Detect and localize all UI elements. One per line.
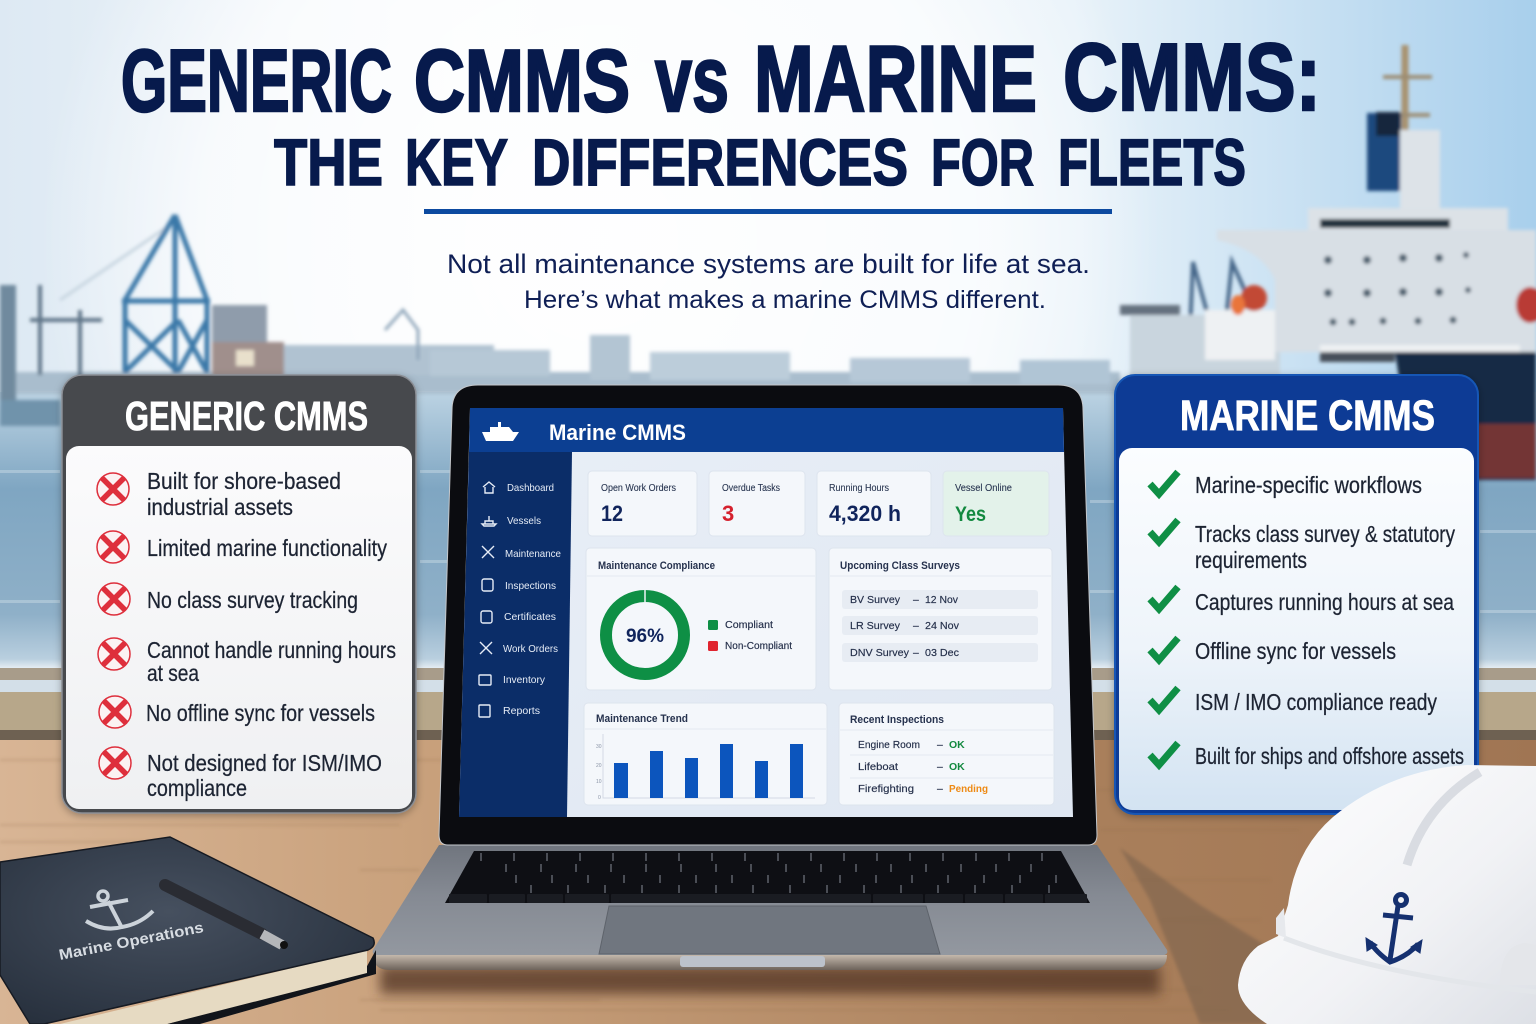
card: upcoming class surveys: – [913,594,919,606]
panel: generic CMMS [62,375,416,813]
panel: marine CMMS [1115,375,1478,814]
KPI: overdue tasks: Overdue Tasks [722,483,780,494]
chart legend: Non-Compliant [725,640,792,652]
card: upcoming class surveys: – [913,647,919,659]
card: recent inspections: Engine Room [858,739,920,751]
list: marine CMMS strengths: Built for ships and offshore assets [1195,743,1464,769]
card: recent inspections: – [937,739,943,751]
chart legend: Compliant [725,619,773,631]
card: recent inspections [839,703,1054,805]
KPI: overdue tasks: 3 [722,501,734,526]
app name: Marine CMMS [549,420,686,445]
app sidebar: Maintenance [505,548,561,560]
card: upcoming class surveys [829,548,1052,690]
subtitle: Here’s what makes a marine CMMS different. [524,286,1046,314]
list: generic CMMS limitations: industrial assets [147,494,293,520]
title line 2: THE [274,125,383,199]
card: upcoming class surveys: LR Survey [850,620,901,632]
card: recent inspections: OK [949,761,965,773]
list: marine CMMS strengths [1150,472,1464,769]
card: upcoming class surveys: BV Survey [850,594,901,606]
laptop base [373,845,1167,970]
app header bar [469,408,1064,452]
app sidebar: Inventory [503,674,546,686]
list: generic CMMS limitations: No class survey tracking [147,587,358,613]
list: marine CMMS strengths: Tracks class survey & statutory [1195,521,1455,547]
KPI: vessel online: Vessel Online [955,483,1012,494]
app sidebar: Work Orders [503,643,558,655]
card: maintenance trend: Maintenance Trend [596,713,688,725]
title line 1: MARINE [754,26,1037,131]
donut chart: 96% [606,590,684,674]
title line 2 [274,125,1246,199]
title line 2: KEY [405,125,508,199]
card: recent inspections: Pending [949,783,988,795]
card: upcoming class surveys: Upcoming Class Surveys [840,560,960,572]
chart legend [708,619,792,652]
KPI: vessel online [943,471,1049,536]
card: upcoming class surveys: 24 Nov [925,620,960,632]
title line 1: GENERIC [121,31,392,130]
pen [165,885,288,949]
notebook label: Marine Operations [58,919,205,964]
title line 1: vs [655,26,729,131]
card: maintenance trend [584,703,827,805]
app sidebar [459,452,572,817]
list: generic CMMS limitations: at sea [147,660,199,686]
card: upcoming class surveys: 03 Dec [925,647,959,659]
notebook: marine operations [0,837,376,1024]
main title [121,24,1321,199]
icon: ship [482,422,519,441]
list: marine CMMS strengths: ISM / IMO compliance ready [1195,689,1437,715]
KPI: overdue tasks [709,471,805,536]
KPI: running hours: 4,320 h [829,501,901,526]
card: recent inspections: Firefighting [858,783,914,795]
card: maintenance compliance [586,548,816,690]
subtitle [447,249,1090,314]
card: maintenance compliance: Maintenance Compliance [598,560,715,572]
bar chart: 30 [596,744,602,750]
app sidebar: Inspections [505,580,556,592]
KPI: vessel online: Yes [955,503,986,526]
title line 2: FLEETS [1058,125,1246,199]
card: upcoming class surveys: – [913,620,919,632]
list: generic CMMS limitations: Not designed for ISM/IMO [147,750,382,776]
card: recent inspections: – [937,761,943,773]
hard hat [1238,765,1536,1024]
title line 2: FOR [931,125,1034,199]
list: generic CMMS limitations: Limited marine functionality [147,535,387,561]
app sidebar: Dashboard [507,482,554,494]
icon: anchor [86,891,153,929]
laptop [373,385,1167,970]
icon: navy anchor [1366,894,1422,962]
subtitle: Not all maintenance systems are built for life at sea. [447,249,1090,279]
list: marine CMMS strengths: Marine-specific workflows [1195,472,1422,498]
card: upcoming class surveys: DNV Survey [850,647,910,659]
bar chart [596,734,815,801]
title underline [424,209,1112,214]
list: marine CMMS strengths: Offline sync for vessels [1195,638,1396,664]
list: marine CMMS strengths: Captures running hours at sea [1195,589,1454,615]
title line 1: CMMS [414,31,630,130]
card: recent inspections: – [937,783,943,795]
laptop screen [459,408,1073,817]
app sidebar: Certificates [504,611,556,623]
card: upcoming class surveys: 12 Nov [925,594,959,606]
KPI: open work orders [588,471,697,536]
list: marine CMMS strengths: requirements [1195,547,1307,573]
bar chart: 10 [596,779,602,785]
card: recent inspections: Lifeboat [858,761,898,773]
list: generic CMMS limitations: Cannot handle running hours [147,637,396,663]
donut chart: 96%: 96% [626,626,664,647]
app sidebar: Vessels [507,515,541,527]
KPI: open work orders: 12 [601,501,623,526]
KPI: running hours: Running Hours [829,483,889,494]
title line 2: DIFFERENCES [532,125,908,199]
card: recent inspections: Recent Inspections [850,714,944,726]
KPI: open work orders: Open Work Orders [601,483,676,494]
list: generic CMMS limitations [97,468,396,801]
card: recent inspections: OK [949,739,965,751]
list: generic CMMS limitations: compliance [147,775,247,801]
heading: marine CMMS: MARINE CMMS [1180,392,1435,440]
laptop lid [439,385,1097,845]
bar chart: 0 [598,795,601,801]
bar chart: 20 [596,763,602,769]
title line 1: CMMS: [1063,24,1321,131]
KPI: running hours [817,471,931,536]
title line 1 [121,24,1321,131]
heading: generic CMMS: GENERIC CMMS [125,393,368,439]
list: generic CMMS limitations: Built for shore-based [147,468,341,494]
app sidebar: Reports [503,705,540,717]
list: generic CMMS limitations: No offline sync for vessels [146,700,375,726]
